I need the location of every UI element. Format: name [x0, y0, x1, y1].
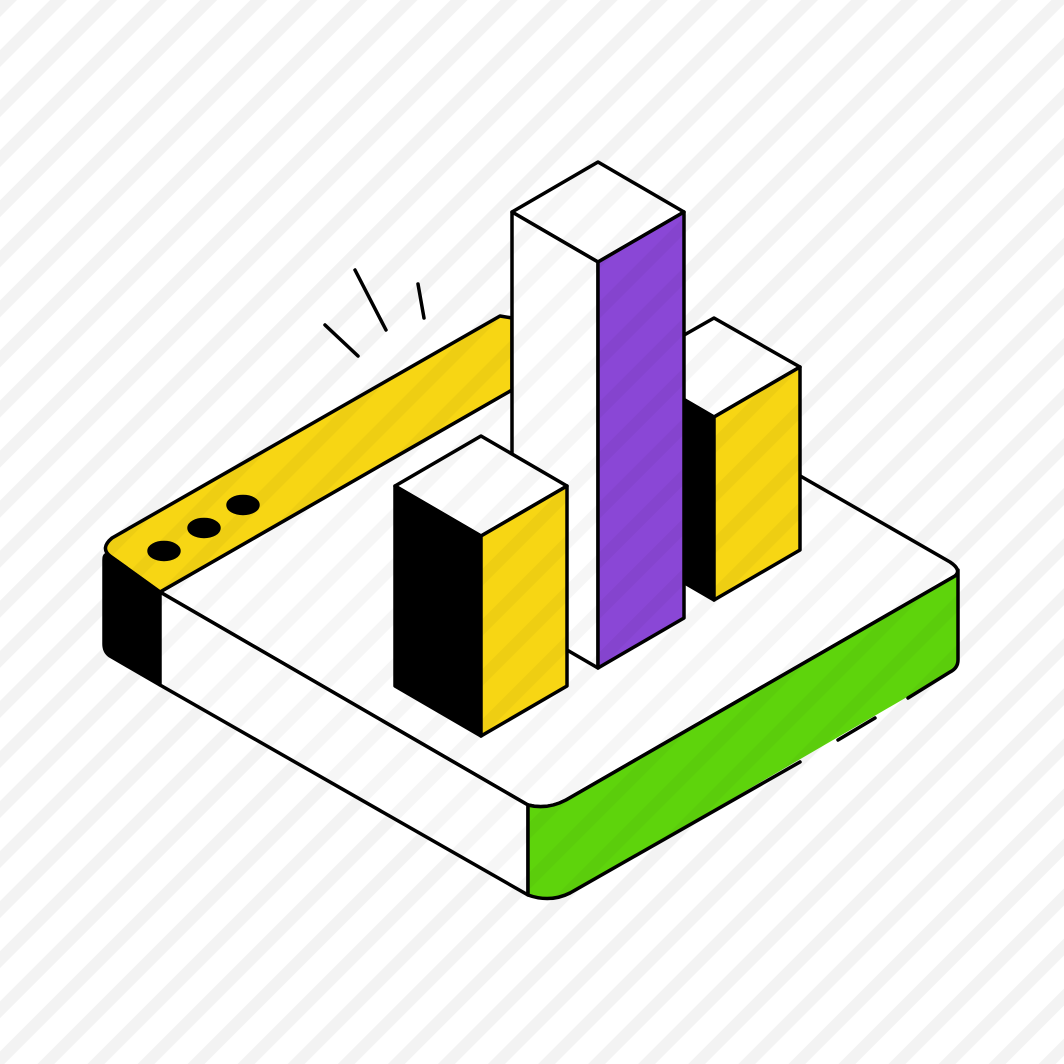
bar: back right — [628, 318, 800, 600]
platform — [104, 316, 958, 899]
bar: tall purple — [512, 162, 684, 668]
yellow top strip — [105, 316, 512, 592]
platform top face — [160, 350, 958, 807]
spark lines — [325, 270, 424, 356]
left black side — [104, 555, 160, 685]
green right side — [528, 570, 958, 899]
front white side — [160, 592, 528, 895]
dots — [149, 542, 179, 560]
bar: front — [395, 436, 567, 736]
